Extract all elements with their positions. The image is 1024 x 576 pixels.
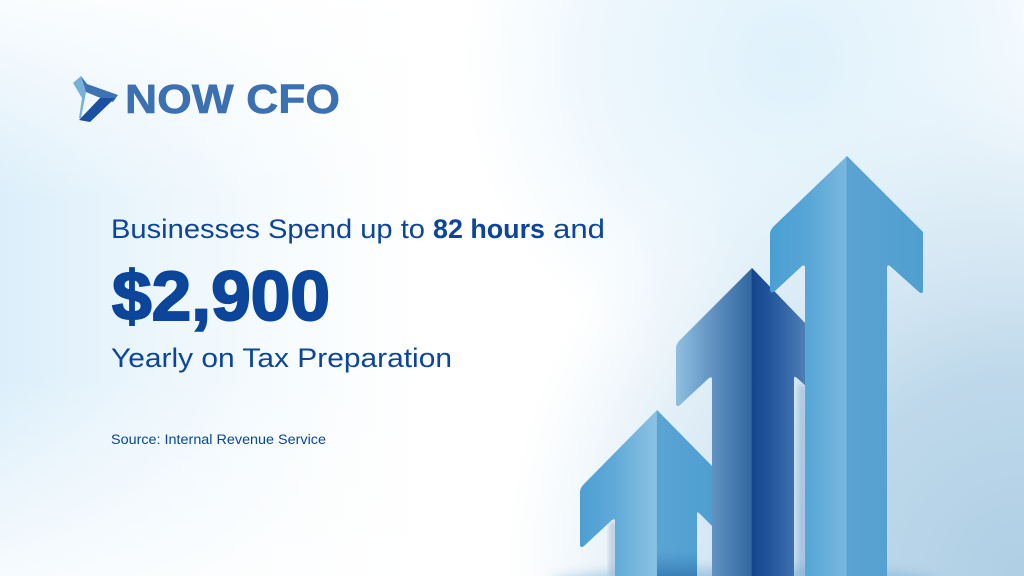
logo: NOW CFO xyxy=(73,76,340,122)
headline line: hours: and xyxy=(553,214,605,244)
headline line: hours xyxy=(111,214,605,244)
middle arrow xyxy=(676,268,806,576)
small arrow xyxy=(580,410,712,576)
subheading: yearly on tax preparation: Yearly on Tax Preparation xyxy=(111,343,452,373)
headline line: hours: 82 hours xyxy=(433,214,545,244)
source note: Source: Internal Revenue Service xyxy=(111,432,326,447)
large arrow xyxy=(770,156,923,576)
logo wordmark: NOW CFO xyxy=(125,76,340,122)
headline line: hours: Businesses Spend up to xyxy=(111,214,425,244)
icon: logo arrow mark xyxy=(73,76,118,122)
floor shadow xyxy=(550,568,940,576)
shaft shadow of middle arrow xyxy=(799,385,806,576)
chart: rising arrows xyxy=(550,156,940,576)
big number: $2,900: $2,900 xyxy=(112,257,330,335)
